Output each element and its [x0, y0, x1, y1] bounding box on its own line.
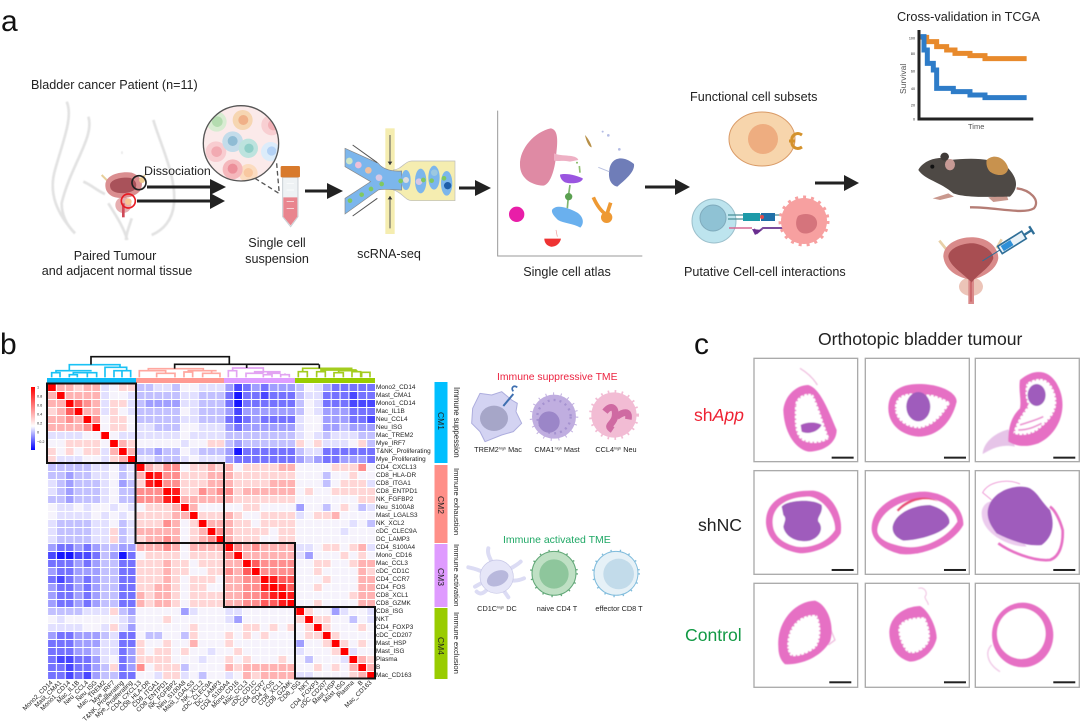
colour scale legend: 1 — [37, 386, 39, 390]
row labels: Mono_CD16 — [376, 552, 412, 559]
column labels: cDC_CLEC9A — [180, 679, 215, 713]
column labels: Mye_Proliferating — [94, 679, 135, 720]
row labels: CD4_CXCL13 — [376, 464, 417, 471]
row labels: Mast_HSP — [376, 640, 407, 647]
icons: suppressive cells — [472, 386, 638, 442]
colour scale legend: 0.2 — [37, 422, 42, 426]
module descriptions: Immune exhaustion — [452, 468, 461, 535]
column labels: CD4_FOXP3 — [289, 679, 321, 711]
blue survival curve — [921, 37, 1027, 98]
column labels: Mast_ISG — [322, 679, 347, 705]
column labels: CD8_XCL1 — [257, 679, 285, 707]
row labels: cDC_CD207 — [376, 632, 412, 639]
arrow: analysis to validation — [815, 175, 859, 191]
labels: suppressive cells: Mast — [562, 445, 580, 454]
green branch — [298, 368, 370, 377]
icon: mouse with tumour — [918, 153, 1036, 211]
section shApp 2 — [888, 384, 957, 437]
row labels: Mast_CMA1 — [376, 392, 412, 399]
icon: red normal tissue marker — [121, 194, 135, 208]
chart: survival curves — [909, 30, 1033, 121]
axis labels: 0 — [913, 117, 915, 121]
column labels: CD8_ISG — [278, 679, 303, 704]
colour scale legend: −0.2 — [37, 440, 44, 444]
row labels: B — [376, 664, 380, 671]
axis labels: 20 — [911, 104, 915, 108]
caption: functional cell subsets: Functional cell subsets — [690, 90, 817, 104]
section control 2 — [889, 588, 937, 662]
panel b label: b — [0, 328, 17, 361]
row labels: NK_FGFBP2 — [376, 496, 414, 503]
illustration: magnified single cells — [203, 106, 282, 194]
section control 1 — [778, 601, 835, 664]
row labels: Plasma — [376, 656, 398, 663]
panel c label: c — [694, 328, 709, 361]
icon: bladder with syringe — [939, 226, 1034, 304]
labels: suppressive cells: high — [499, 446, 506, 450]
axis labels: 40 — [911, 87, 915, 91]
labels: suppressive cells: high — [614, 446, 621, 450]
labels: activated cells: DC — [504, 604, 517, 613]
row labels: Mast_LGALS3 — [376, 512, 418, 519]
row labels: Mono1_CD14 — [376, 400, 416, 407]
row labels: CD8_XCL1 — [376, 592, 409, 599]
row labels: NKT — [376, 616, 389, 623]
module strip CM4: CM4 — [436, 637, 446, 655]
scale bars — [829, 457, 1075, 683]
axis labels: 80 — [911, 52, 915, 56]
TREM2 macrophage — [472, 386, 522, 442]
column labels: Mono_CD16 — [210, 679, 241, 710]
row labels: Neu_CCL4 — [376, 416, 408, 423]
cyan branch — [52, 365, 131, 377]
column labels: Neu_S100A8 — [156, 679, 188, 711]
column labels: CD8_ITGA1 — [131, 679, 161, 709]
row labels: CD4_CCR7 — [376, 576, 410, 583]
icon: centrifuge tube — [281, 166, 300, 227]
row labels: Neu_ISG — [376, 424, 402, 431]
row labels: CD8_GZMK — [376, 600, 412, 607]
axis labels — [909, 36, 915, 121]
column labels: Plasma — [336, 679, 356, 699]
module descriptions — [452, 387, 461, 674]
row labels: Mac_CCL3 — [376, 560, 408, 567]
section shNC 1 — [766, 491, 841, 553]
caption: single cell suspension — [245, 236, 309, 266]
icon: cell-cell interaction — [692, 197, 828, 245]
column labels: DC_LAMP3 — [194, 679, 223, 708]
row labels: CD8_ENTPD1 — [376, 488, 418, 495]
row label shApp: shApp — [694, 405, 744, 425]
survival axis titles — [898, 64, 984, 131]
column labels: NK_XCL2 — [180, 679, 205, 705]
CCL4 neutrophil — [590, 391, 638, 439]
column labels: Mast_HSP — [312, 679, 338, 706]
connector — [247, 364, 319, 368]
column labels: Mye_IRF7 — [91, 679, 117, 705]
column labels: NKT — [298, 679, 312, 693]
salmon branch — [139, 369, 220, 377]
labels: suppressive cells: Mac — [506, 445, 522, 454]
row labels: Mye_IRF7 — [376, 440, 406, 447]
cluster colour bars — [47, 378, 375, 383]
module descriptions: Immune activation — [452, 544, 461, 606]
module strip CM1: CM1 — [436, 412, 446, 430]
row labels: Mast_ISG — [376, 648, 404, 655]
column labels: CD4_FOS — [250, 679, 276, 705]
heading: orthotopic bladder tumour: Orthotopic bladder tumour — [818, 329, 1023, 349]
caption: paired tumour: and adjacent normal tissue — [42, 264, 192, 278]
labels: activated cells: CD1C — [477, 604, 497, 613]
row label shNC: shNC — [698, 515, 742, 535]
module descriptions: Immune suppession — [452, 387, 461, 458]
dissociation label: Dissociation — [144, 164, 211, 178]
icon: black tumour marker — [132, 176, 146, 190]
colour scale legend: 0 — [37, 430, 39, 434]
row labels — [376, 384, 431, 679]
caption: putative interactions: Putative Cell-cell interactions — [684, 265, 846, 279]
row labels: CD8_ITGA1 — [376, 480, 411, 487]
column labels: CD8_GZMK — [264, 679, 294, 709]
caption: single cell suspension: suspension — [245, 252, 309, 266]
panel: histology grid — [754, 358, 1079, 687]
row labels: CD8_ISG — [376, 608, 403, 615]
purple branch — [228, 368, 289, 377]
module strip CM1 — [434, 382, 448, 463]
caption: single cell suspension: Single cell — [248, 236, 306, 250]
CD1C dendritic cell — [468, 548, 524, 597]
section shNC 2 — [872, 492, 963, 554]
connector black — [91, 357, 319, 369]
module strip CM4 — [434, 608, 448, 679]
column labels: CD8_ENTPD1 — [135, 679, 170, 714]
heading: immune activated TME: Immune activated TME — [503, 534, 611, 546]
panel a label: a — [1, 5, 18, 38]
column labels: Neu_CCL4 — [63, 679, 90, 707]
column labels: B — [357, 679, 365, 687]
heading: immune suppressive TME: Immune suppressive TME — [497, 372, 618, 383]
arrow: normal tissue to suspension — [137, 193, 225, 209]
column labels: cDC_CD1C — [230, 679, 259, 708]
column labels — [22, 679, 374, 723]
row labels: CD4_FOS — [376, 584, 405, 591]
section control 3 — [988, 603, 1053, 672]
labels: suppressive cells: Neu — [621, 445, 637, 454]
arrow: suspension to sequencing — [305, 183, 343, 199]
row labels: cDC_CD1C — [376, 568, 410, 575]
column labels: Mono1_CD14 — [39, 679, 72, 712]
macrophage cluster — [520, 128, 557, 186]
row labels: Neu_S100A8 — [376, 504, 414, 511]
caption: single cell atlas: Single cell atlas — [523, 265, 611, 279]
column labels: Mono2_CD14 — [22, 679, 55, 712]
module descriptions: Immune exclusion — [452, 612, 461, 674]
labels: suppressive cells: TREM2 — [474, 445, 499, 454]
column labels: Neu_ISG — [75, 679, 99, 703]
axis labels: 60 — [911, 69, 915, 73]
row labels: Mono2_CD14 — [376, 384, 416, 391]
labels: suppressive cells: CMA1 — [534, 445, 555, 454]
labels: suppressive cells: CCL4 — [595, 445, 614, 454]
dendrogram — [52, 357, 370, 377]
column labels: Mac_CD163 — [343, 679, 374, 710]
CMA1 mast cell — [531, 394, 577, 440]
row labels: DC_LAMP3 — [376, 536, 410, 543]
survival axis titles: Survival — [898, 64, 908, 94]
row labels: Mac_CD163 — [376, 672, 412, 679]
caption: paired tumour — [42, 249, 192, 278]
labels: activated cells: naive CD4 T — [537, 604, 578, 613]
arrow: atlas to functional analysis — [645, 179, 690, 195]
naive CD4 T cell — [531, 550, 577, 596]
labels: suppressive cells — [474, 445, 637, 454]
colour scale legend — [31, 386, 44, 450]
labels: suppressive cells: high — [555, 446, 562, 450]
labels: activated cells — [477, 604, 643, 613]
icon: functional cell — [729, 112, 802, 166]
colour scale legend: 0.6 — [37, 404, 42, 408]
survival axis titles: Time — [968, 122, 984, 131]
row labels: CD4_FOXP3 — [376, 624, 414, 631]
column labels: Mast_CMA1 — [33, 679, 64, 709]
illustration: scRNA-seq microfluidics — [345, 128, 455, 234]
row labels: CD8_HLA-DR — [376, 472, 417, 479]
row labels: cDC_CLEC9A — [376, 528, 418, 535]
axis labels: 100 — [909, 36, 915, 40]
module strip CM3: CM3 — [436, 568, 446, 586]
chart: correlation heatmap — [22, 357, 431, 723]
column labels: Mac_CCL3 — [222, 679, 250, 707]
illustration: patient pelvis with bladder — [53, 102, 174, 240]
chart: UMAP single cell atlas — [498, 111, 642, 256]
arrow: sequencing to atlas — [459, 180, 491, 196]
colour scale legend: 0.8 — [37, 394, 42, 398]
column labels: CD4_S100A4 — [199, 679, 232, 712]
section shApp 3 — [983, 372, 1062, 454]
row labels: Mac_IL1B — [376, 408, 405, 415]
effector CD8 T cell — [593, 550, 639, 596]
column labels: CD8_HLA-DR — [119, 679, 152, 713]
column labels: Mast_LGALS3 — [162, 679, 197, 714]
colour scale legend: 0.4 — [37, 412, 42, 416]
section shNC 3 — [982, 481, 1063, 560]
column labels: cDC_CD207 — [299, 679, 330, 710]
labels: activated cells: effector CD8 T — [595, 604, 643, 613]
icon: body outline — [53, 102, 174, 240]
orange survival curve — [921, 37, 1027, 59]
module boxes — [47, 384, 375, 678]
arrow: tumour to suspension — [147, 179, 226, 195]
row labels: CD4_S100A4 — [376, 544, 416, 551]
module strip CM3 — [434, 544, 448, 607]
histology frames — [754, 358, 1079, 687]
column labels: Mac_TREM2 — [76, 679, 108, 711]
icon: bladder — [102, 172, 145, 217]
column labels: Mac_IL1B — [56, 679, 81, 705]
column labels: CD4_CCR7 — [238, 679, 268, 708]
syringe — [980, 226, 1034, 265]
patient heading: Bladder cancer Patient (n=11) — [31, 78, 198, 92]
column labels: CD4_CXCL13 — [110, 679, 143, 713]
module strip CM2 — [434, 465, 448, 543]
row labels: NK_XCL2 — [376, 520, 405, 527]
column labels: NK_FGFBP2 — [147, 679, 179, 711]
heatmap cells — [47, 383, 375, 679]
heading: cross-validation: Cross-validation in TCGA — [897, 10, 1040, 24]
caption: paired tumour: Paired Tumour — [74, 249, 156, 263]
caption: scRNA-seq: scRNA-seq — [357, 247, 421, 261]
row labels: Mac_TREM2 — [376, 432, 414, 439]
row labels: T&NK_Proliferating — [376, 448, 431, 455]
row label Control: Control — [685, 625, 742, 645]
column labels: T&NK_Proliferating — [82, 679, 126, 723]
section shApp 1 — [783, 368, 837, 452]
axes — [919, 30, 1033, 119]
labels: activated cells: high — [497, 606, 504, 610]
icons: activated cells — [468, 548, 639, 597]
module strip CM2: CM2 — [436, 496, 446, 514]
row labels: Mye_Proliferating — [376, 456, 426, 463]
